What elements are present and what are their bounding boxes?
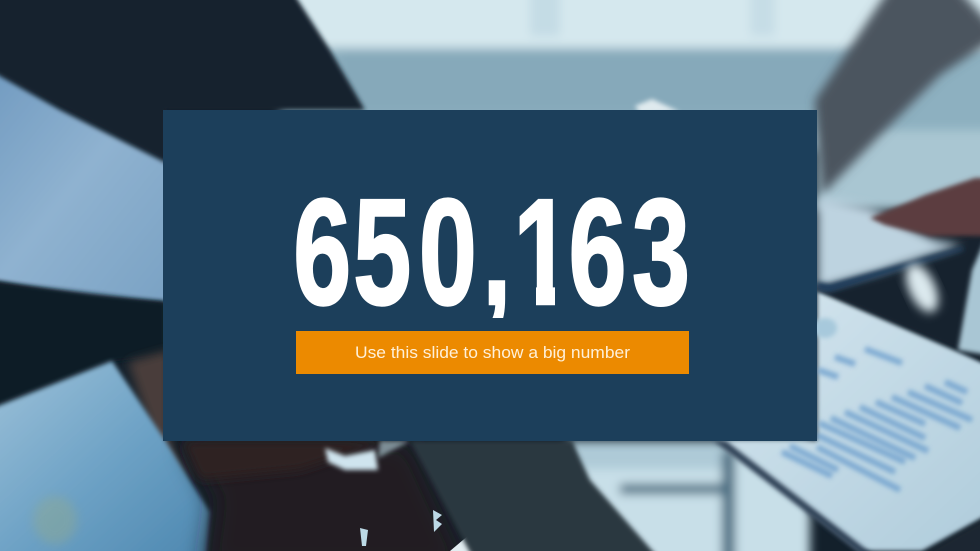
document lower right — [720, 290, 980, 551]
orange caption bar — [296, 331, 689, 374]
shirt sleeve — [0, 65, 170, 302]
dark device — [410, 441, 670, 551]
hand on paper — [870, 178, 980, 236]
light paper behind panel — [635, 99, 680, 114]
big number: 63 — [569, 169, 690, 337]
big number — [293, 169, 690, 337]
wrist — [128, 350, 190, 480]
dark table top right — [817, 225, 980, 370]
floor and table legs — [568, 441, 810, 551]
main navy panel — [163, 110, 817, 441]
chart bars on document — [782, 349, 972, 490]
shirt cuff — [0, 361, 210, 551]
caption text: Use this slide to show a big number — [355, 343, 630, 362]
hands and dark middle — [185, 441, 470, 551]
suit sleeve top right — [815, 0, 980, 195]
dark zone below sleeve — [0, 280, 165, 412]
big number: 1 — [513, 169, 571, 337]
window — [280, 0, 980, 210]
white highlights — [325, 448, 378, 470]
glare — [899, 259, 945, 317]
upper right papers — [817, 196, 962, 288]
big number: 650, — [293, 169, 511, 337]
dark suit top left — [0, 0, 365, 160]
